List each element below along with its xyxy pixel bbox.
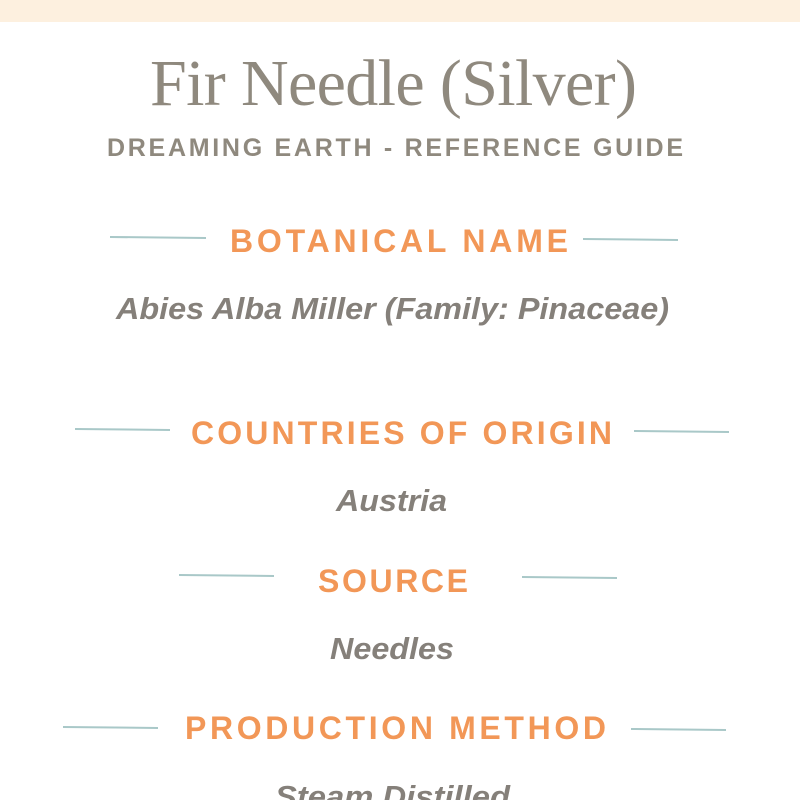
title: Fir Needle (Silver) <box>150 47 637 120</box>
heading: countries of origin: COUNTRIES OF ORIGIN <box>191 415 612 451</box>
value: source: Needles <box>330 631 454 666</box>
section: botanical name <box>110 223 678 326</box>
heading: botanical name: BOTANICAL NAME <box>230 223 568 259</box>
value: botanical name: Abies Alba Miller (Family: Pinaceae) <box>115 291 669 326</box>
top cream band <box>0 0 800 22</box>
section: production method <box>63 710 726 800</box>
subtitle: DREAMING EARTH - REFERENCE GUIDE <box>107 134 683 162</box>
heading: production method: PRODUCTION METHOD <box>185 710 606 746</box>
heading: source: SOURCE <box>318 563 468 599</box>
section: countries of origin <box>75 415 729 518</box>
value: countries of origin: Austria <box>335 483 447 518</box>
section: source <box>179 563 617 666</box>
